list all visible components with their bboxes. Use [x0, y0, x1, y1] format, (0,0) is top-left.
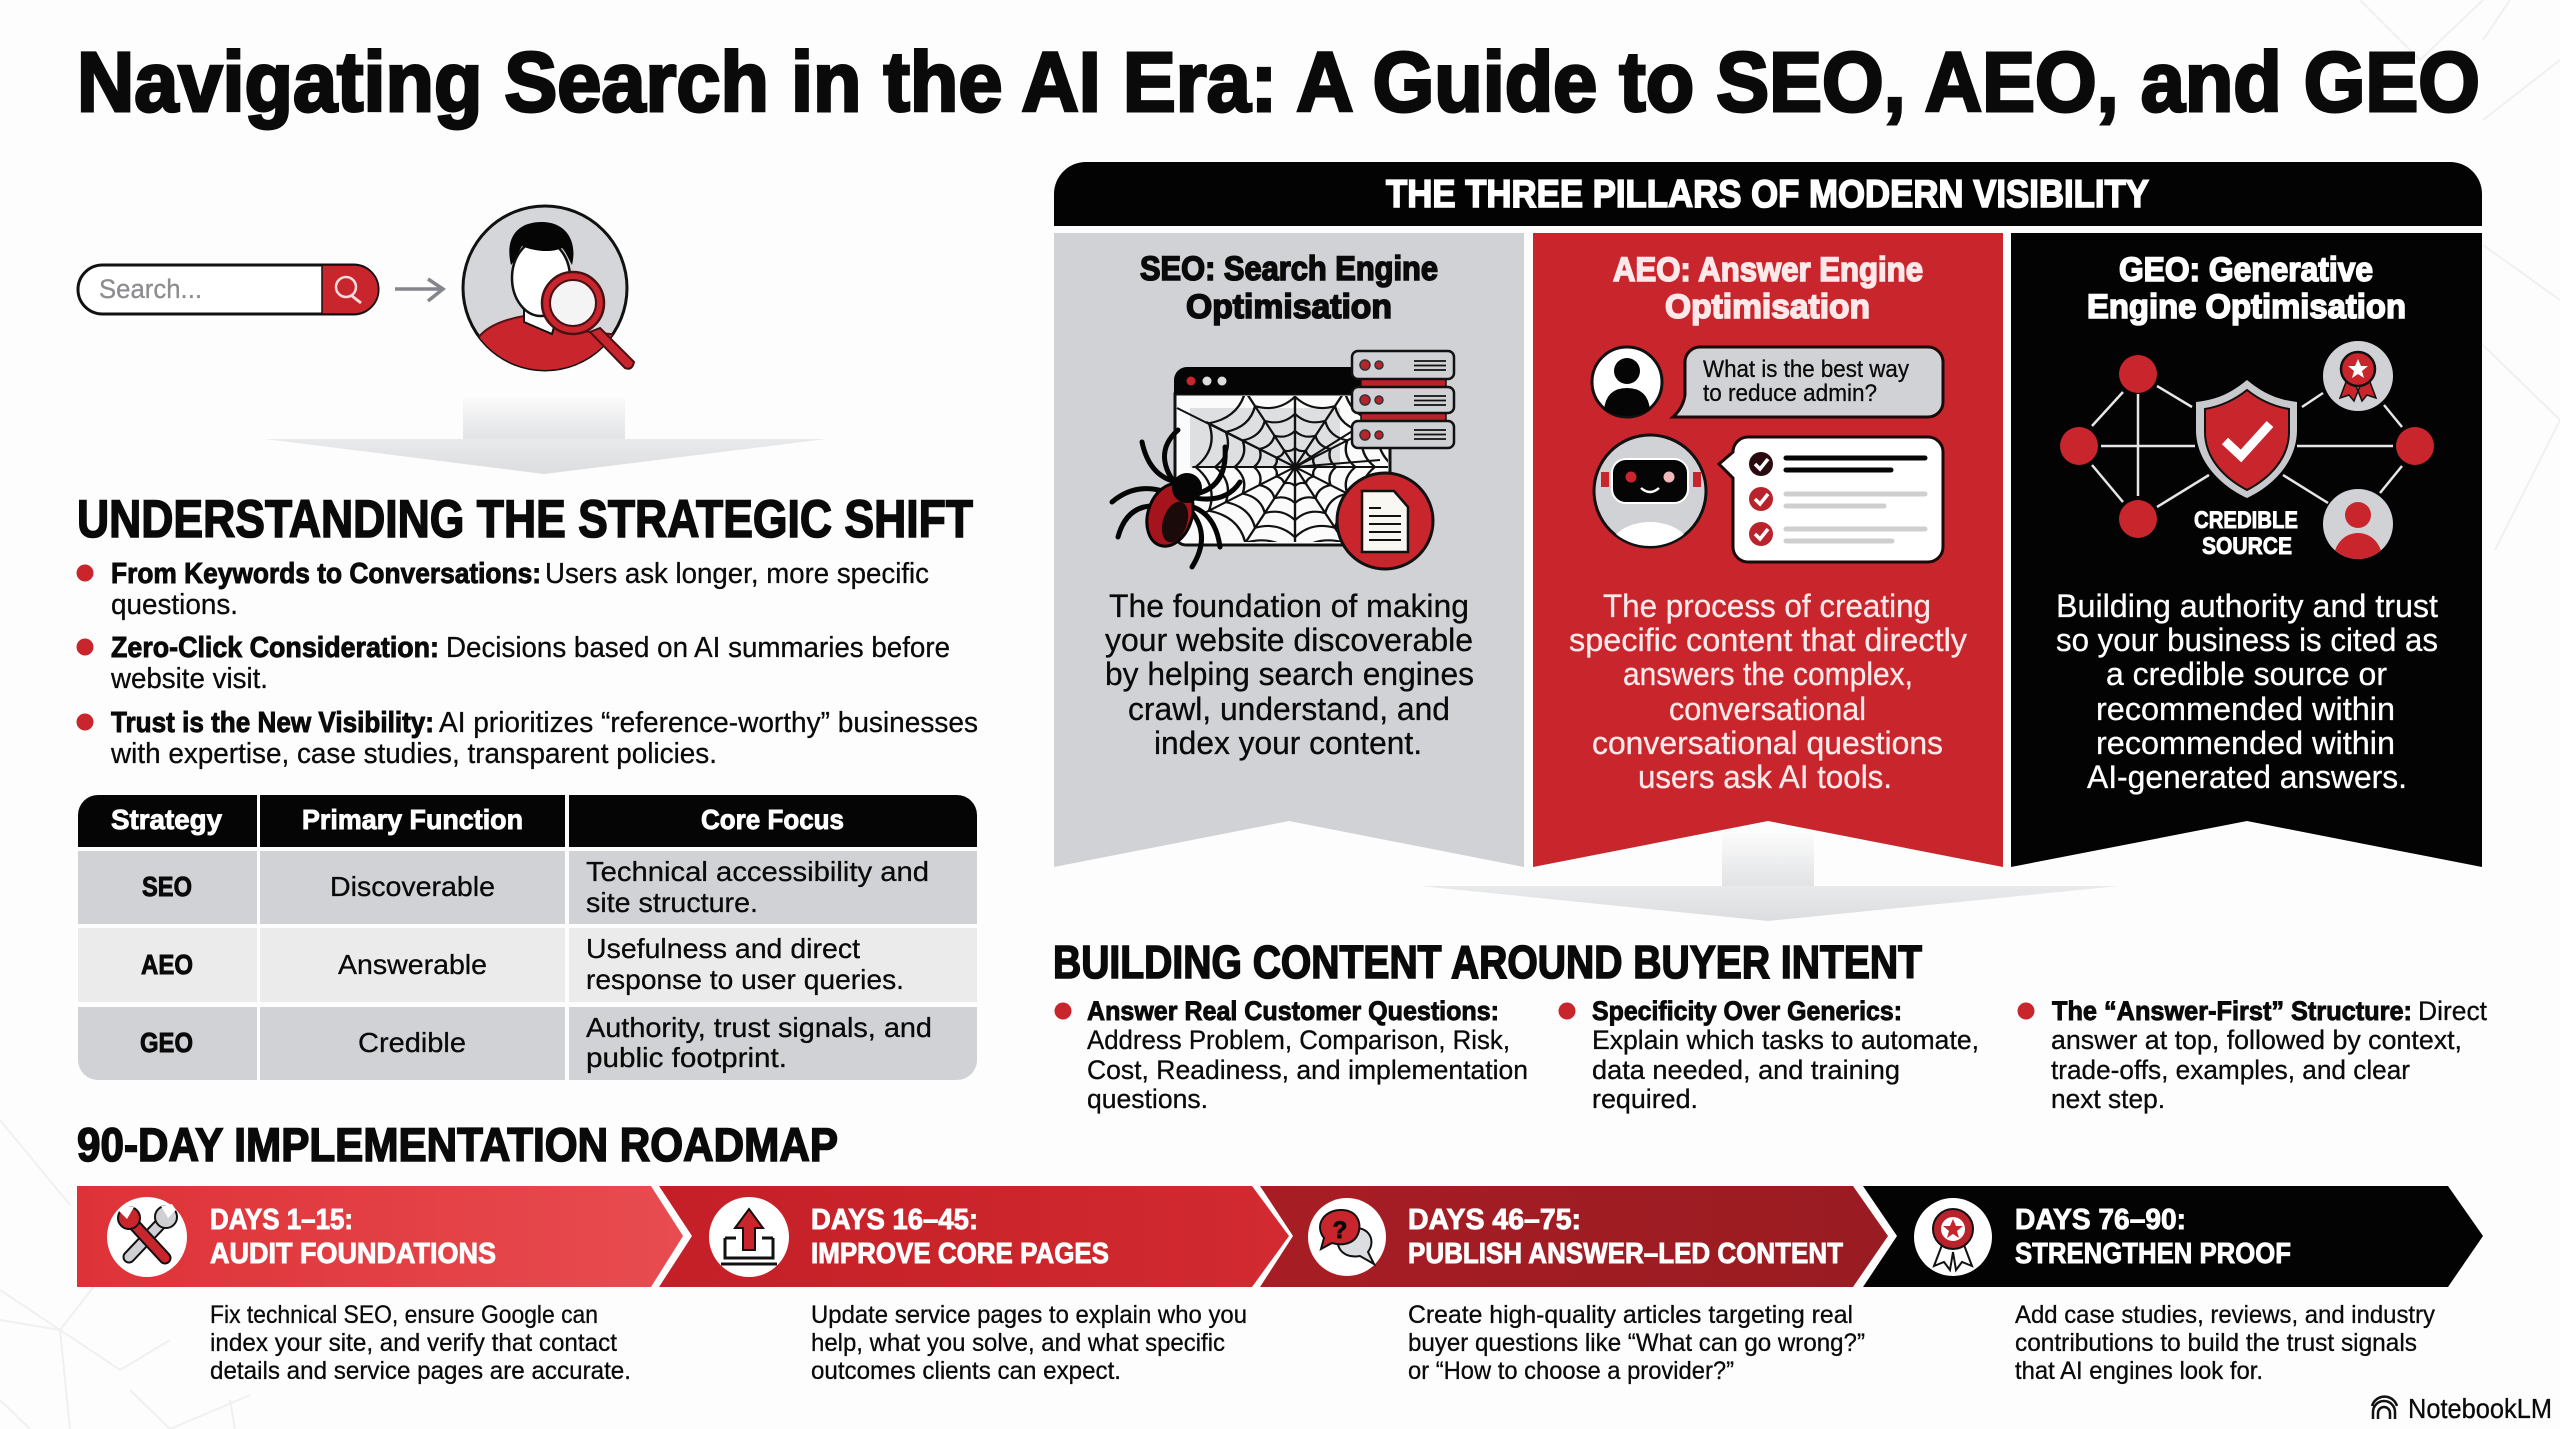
bullet: customer questions: Answer Real Customer Questions:	[1087, 996, 1499, 1026]
SEO heading	[1140, 250, 1438, 326]
AEO description: conversational questions	[1592, 725, 1943, 761]
GEO description: AI-generated answers.	[2087, 759, 2407, 795]
roadmap text: days 46-75: Create high-quality articles targeting real	[1408, 1301, 1853, 1329]
search bar	[78, 265, 378, 314]
SEO description: by helping search engines	[1105, 656, 1474, 692]
roadmap text: days 16-45: Update service pages to explain who you	[811, 1301, 1247, 1329]
table: strategy comparison	[78, 795, 977, 1080]
label: credible source: CREDIBLE	[2194, 507, 2298, 534]
bullet 2: Decisions based on AI summaries before	[446, 632, 950, 664]
GEO heading	[2087, 251, 2406, 326]
roadmap: days 1-15: DAYS 1–15:	[210, 1204, 353, 1236]
bullet: answer first: The “Answer-First” Structure:	[2052, 996, 2412, 1026]
roadmap: days 46-75: PUBLISH ANSWER–LED CONTENT	[1408, 1238, 1843, 1270]
roadmap text: days 16-45: help, what you solve, and what specific	[811, 1329, 1225, 1357]
bullet: customer questions	[1054, 996, 1528, 1114]
bullet list: strategic shift	[76, 558, 978, 770]
bullet 1: Users ask longer, more specific	[545, 558, 929, 590]
roadmap text: days 76-90: Add case studies, reviews, and industry	[2015, 1301, 2435, 1329]
SEO heading: Optimisation	[1186, 288, 1392, 326]
GEO description	[2056, 588, 2438, 795]
icon: question bubbles: ?	[1333, 1217, 1347, 1244]
GEO heading: GEO: Generative	[2119, 251, 2373, 289]
heading: buyer intent: BUILDING CONTENT AROUND BUYER INTENT	[1053, 936, 1922, 988]
row: SEO: Technical accessibility and	[586, 856, 929, 887]
icon: credible source network	[2060, 341, 2434, 583]
heading: strategic shift: UNDERSTANDING THE STRATEGIC SHIFT	[77, 490, 973, 549]
bullet 1	[76, 558, 929, 621]
bullet 3: AI prioritizes “reference-worthy” businesses	[439, 707, 978, 739]
title: Navigating Search in the AI Era: A Guide to SEO, AEO, and GEO	[77, 35, 2480, 129]
roadmap text: days 46-75: or “How to choose a provider?”	[1408, 1357, 1734, 1385]
AEO description: The process of creating	[1603, 588, 1931, 624]
bullet: specificity: Specificity Over Generics:	[1592, 996, 1902, 1026]
roadmap: days 46-75: DAYS 46–75:	[1408, 1204, 1581, 1236]
bullet: customer questions: questions.	[1087, 1084, 1208, 1114]
GEO description: so your business is cited as	[2056, 622, 2438, 658]
bullet: answer first: trade-offs, examples, and clear	[2051, 1055, 2410, 1085]
AEO description: specific content that directly	[1569, 622, 1967, 658]
arrow: search to person	[395, 279, 443, 301]
roadmap text: days 1-15: Fix technical SEO, ensure Google can	[210, 1301, 598, 1329]
row: AEO: Usefulness and direct	[586, 933, 860, 964]
row: SEO: SEO	[142, 871, 192, 902]
table header: Strategy	[111, 804, 222, 835]
bullet: answer first: answer at top, followed by context,	[2051, 1025, 2462, 1055]
row: AEO: AEO	[141, 949, 193, 980]
SEO description: crawl, understand, and	[1128, 691, 1450, 727]
GEO description: recommended within	[2096, 725, 2395, 761]
bullet 2	[76, 632, 950, 695]
bullet 3	[76, 707, 978, 770]
SEO description	[1105, 588, 1474, 761]
row: SEO: site structure.	[586, 887, 758, 918]
SEO description: The foundation of making	[1109, 588, 1469, 624]
label: credible source	[2194, 507, 2298, 560]
roadmap text: days 1-15: details and service pages are accurate.	[210, 1357, 631, 1385]
bullet: answer first: next step.	[2051, 1084, 2165, 1114]
bullet 3: Trust is the New Visibility:	[111, 707, 434, 739]
SEO description: your website discoverable	[1105, 622, 1473, 658]
roadmap: days 76-90: STRENGTHEN PROOF	[2015, 1238, 2291, 1270]
row: GEO	[78, 1007, 977, 1080]
roadmap text: days 76-90: contributions to build the trust signals	[2015, 1329, 2417, 1357]
bullet list: buyer intent	[1054, 996, 2488, 1114]
label: credible source: SOURCE	[2202, 533, 2292, 560]
GEO heading: Engine Optimisation	[2087, 288, 2406, 326]
icon: spider web on browser with servers	[1112, 351, 1454, 569]
icon: user question and AI answer: What is the best way	[1703, 356, 1909, 383]
roadmap text: days 46-75	[1408, 1301, 1865, 1385]
bullet 2: website visit.	[110, 663, 268, 695]
bullet: specificity: required.	[1592, 1084, 1698, 1114]
roadmap: days 76-90: DAYS 76–90:	[2015, 1204, 2186, 1236]
AEO description	[1569, 588, 1967, 795]
AEO description: answers the complex,	[1623, 656, 1913, 692]
icon: person with magnifier	[463, 206, 634, 375]
row: AEO	[78, 928, 977, 1002]
roadmap text: days 16-45: outcomes clients can expect.	[811, 1357, 1121, 1385]
SEO description: index your content.	[1154, 725, 1422, 761]
roadmap text: days 1-15: index your site, and verify that contact	[210, 1329, 617, 1357]
bullet: specificity: data needed, and training	[1592, 1055, 1900, 1085]
table header	[78, 795, 977, 847]
icon: wrench and spanner	[107, 1197, 187, 1277]
AEO heading: AEO: Answer Engine	[1613, 251, 1923, 289]
roadmap text: days 76-90: that AI engines look for.	[2015, 1357, 2263, 1385]
row: AEO: Answerable	[338, 949, 487, 980]
table header: Primary Function	[302, 804, 523, 835]
AEO heading: Optimisation	[1665, 288, 1870, 326]
heading: roadmap: 90-DAY IMPLEMENTATION ROADMAP	[77, 1118, 838, 1171]
roadmap: days 16-45: DAYS 16–45:	[811, 1204, 978, 1236]
GEO description: a credible source or	[2106, 656, 2387, 692]
roadmap: days 1-15: AUDIT FOUNDATIONS	[210, 1238, 496, 1270]
SEO heading: SEO: Search Engine	[1140, 250, 1438, 288]
row: SEO: Discoverable	[330, 871, 495, 902]
arrow: down to buyer intent	[1420, 833, 2119, 921]
bullet 1: questions.	[111, 589, 238, 621]
row: GEO: Credible	[358, 1027, 466, 1058]
panel: AEO	[1533, 233, 2003, 867]
icon: question bubbles	[1308, 1198, 1386, 1276]
arrow: down to strategic shift	[265, 397, 826, 474]
roadmap text: days 1-15	[210, 1301, 631, 1385]
icon: user question and AI answer	[1592, 347, 1943, 582]
panel: SEO	[1054, 233, 1524, 867]
bullet 1: From Keywords to Conversations:	[111, 558, 541, 590]
icon: award rosette	[1914, 1198, 1992, 1276]
panel: GEO	[2011, 233, 2482, 867]
AEO heading	[1613, 251, 1923, 326]
bullet: specificity: Explain which tasks to automate,	[1592, 1025, 1979, 1055]
bullet 2: Zero-Click Consideration:	[111, 632, 439, 664]
icon: user question and AI answer: to reduce admin?	[1703, 380, 1877, 407]
GEO description: recommended within	[2096, 691, 2395, 727]
row: AEO: response to user queries.	[586, 964, 904, 995]
AEO description: conversational	[1669, 691, 1866, 727]
GEO description: Building authority and trust	[2056, 588, 2438, 624]
row: SEO	[78, 851, 977, 924]
bullet: specificity	[1558, 996, 1979, 1114]
row: GEO: Authority, trust signals, and	[586, 1012, 932, 1043]
AEO description: users ask AI tools.	[1638, 759, 1892, 795]
roadmap: days 16-45	[659, 1186, 1289, 1287]
bullet 3: with expertise, case studies, transparent policies.	[110, 738, 717, 770]
roadmap: days 1-15	[77, 1186, 683, 1287]
banner: three pillars	[1054, 162, 2482, 226]
roadmap text: days 46-75: buyer questions like “What can go wrong?”	[1408, 1329, 1865, 1357]
table header: Core Focus	[701, 804, 844, 835]
roadmap text: days 76-90	[2015, 1301, 2435, 1385]
bullet: customer questions: Address Problem, Comparison, Risk,	[1087, 1025, 1510, 1055]
bullet: customer questions: Cost, Readiness, and implementation	[1087, 1055, 1528, 1085]
bullet: answer first: Direct	[2418, 996, 2488, 1026]
roadmap: days 46-75	[1260, 1186, 1888, 1287]
search bar: Search...	[99, 274, 202, 304]
row: GEO: GEO	[140, 1027, 193, 1058]
roadmap: days 16-45: IMPROVE CORE PAGES	[811, 1238, 1109, 1270]
row: GEO: public footprint.	[586, 1042, 787, 1073]
roadmap: days 76-90	[1863, 1186, 2483, 1287]
bullet: answer first	[2018, 996, 2488, 1114]
roadmap text: days 16-45	[811, 1301, 1247, 1385]
icon: upload	[709, 1197, 789, 1277]
banner: three pillars: THE THREE PILLARS OF MODERN VISIBILITY	[1386, 173, 2149, 216]
